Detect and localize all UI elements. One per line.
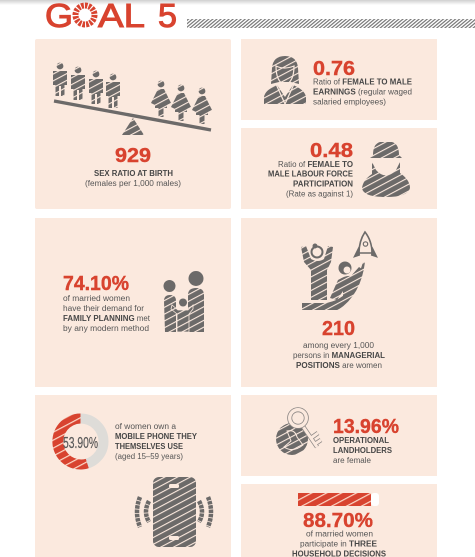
stat: 0.76: 0.76 xyxy=(313,58,355,80)
stat: 210: 210 xyxy=(322,318,355,340)
panel: labour force participation xyxy=(241,128,437,209)
text: labour description xyxy=(268,160,354,198)
text: family planning description: have their demand for xyxy=(63,304,144,313)
icon: vibrating phone xyxy=(137,477,211,547)
chart: progress bar 88.70% xyxy=(298,493,379,506)
text: labour description: MALE LABOUR FORCE xyxy=(268,170,354,178)
panel: family planning xyxy=(35,218,231,387)
stat: 13.96%: 13.96% xyxy=(333,416,399,438)
text: mobile description xyxy=(115,422,198,461)
icon: seesaw with men and women xyxy=(53,63,212,135)
text: landholders description: LANDHOLDERS xyxy=(333,446,393,455)
stat: 0.48: 0.48 xyxy=(310,140,353,162)
text: family planning description: FAMILY PLANNING met xyxy=(63,314,151,323)
text: managerial description: POSITIONS are women xyxy=(296,361,382,370)
text: earnings description: Ratio of FEMALE TO MALE xyxy=(313,78,413,86)
text: family planning description xyxy=(63,294,151,333)
text: landholders description: OPERATIONAL xyxy=(333,436,389,445)
icon: woman in hard hat xyxy=(362,142,410,197)
text: landholders description xyxy=(333,436,393,465)
text: mobile description: MOBILE PHONE THEY xyxy=(115,432,198,441)
stat: 74.10%: 74.10% xyxy=(63,273,129,295)
text: decisions description xyxy=(292,530,387,557)
panel: operational landholders xyxy=(241,395,437,476)
text: labour description: Ratio of FEMALE TO xyxy=(278,160,353,169)
panel: sex ratio at birth: (females per 1,000 males) xyxy=(85,179,181,188)
icon: businesswoman xyxy=(264,56,306,104)
hatched title rule xyxy=(187,19,475,28)
chart: donut 53.90%: 53.90% xyxy=(63,435,98,452)
panel: sex ratio at birth xyxy=(35,39,231,209)
text: mobile description: THEMSELVES USE xyxy=(115,442,184,451)
stat: 929: 929 xyxy=(115,145,151,167)
text: family planning description: by any modern method xyxy=(63,324,149,333)
icon: women and rocket xyxy=(301,232,377,310)
text: managerial description: among every 1,000 xyxy=(303,341,375,350)
text: decisions description: of married women xyxy=(306,530,373,538)
text: managerial description xyxy=(293,341,385,370)
icon: globe and key xyxy=(276,410,321,455)
stat: 88.70%: 88.70% xyxy=(303,510,373,532)
panel: managerial positions xyxy=(241,218,437,387)
text: managerial description: persons in MANAGERIAL xyxy=(293,351,385,360)
text: mobile description: of women own a xyxy=(115,422,177,431)
text: earnings description: EARNINGS (regular waged xyxy=(313,88,412,96)
icon: family xyxy=(164,271,204,332)
text: landholders description: are female xyxy=(333,456,372,465)
panel: female to male earnings xyxy=(241,39,437,120)
text: decisions description: participate in THREE xyxy=(300,540,378,548)
title: Goal 5 xyxy=(45,0,177,34)
text: labour description: PARTICIPATION xyxy=(293,180,353,188)
label: sex ratio: SEX RATIO AT BIRTH xyxy=(94,169,173,178)
panel: mobile phone xyxy=(35,395,231,557)
text: earnings description: salaried employees) xyxy=(313,98,386,106)
icon: sun ring in title xyxy=(76,6,94,24)
text: mobile description: (aged 15–59 years) xyxy=(115,452,183,461)
text: family planning description: of married women xyxy=(63,294,130,303)
panel: household decisions xyxy=(241,484,437,557)
chart: donut 53.90% xyxy=(52,413,104,469)
text: labour description: (Rate as against 1) xyxy=(286,190,353,198)
text: earnings description xyxy=(313,78,413,106)
